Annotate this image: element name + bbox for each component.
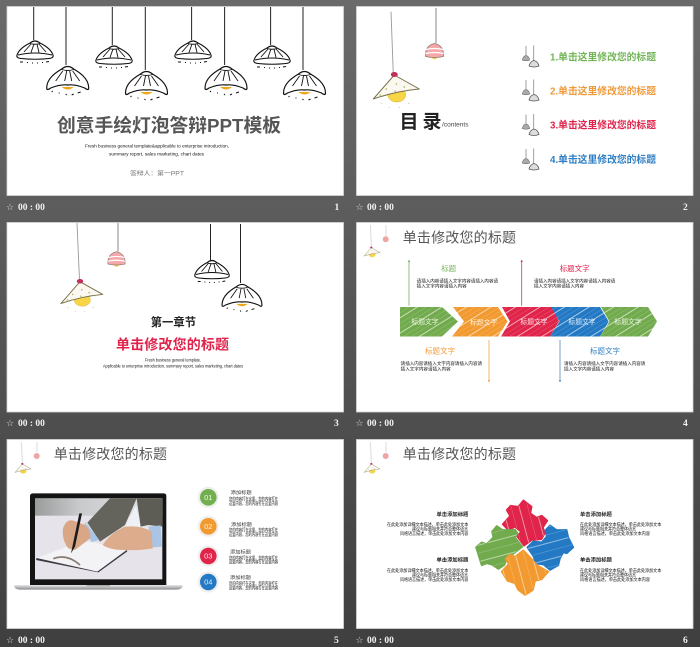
list item 01 xyxy=(198,487,278,508)
heading: contents: 目 录 xyxy=(400,111,442,133)
list item 03: 添加标题 xyxy=(230,548,251,556)
chevron 1: 标题文字 xyxy=(411,317,439,326)
icon: black lamps xyxy=(195,224,262,312)
list item 04: 您的内容打在这里，您的内容打在 xyxy=(229,580,278,587)
chevron 4 xyxy=(550,307,609,336)
arrow: red up xyxy=(520,260,523,306)
list item 03 xyxy=(198,546,278,566)
chapter title: 单击修改您的标题 xyxy=(116,336,229,352)
text block: lower right: 单击添加标题 xyxy=(580,556,612,564)
text block: green: 请插入内容请插入文字内容请插入内容请 xyxy=(417,278,499,284)
chart: four piece puzzle xyxy=(476,500,573,595)
chapter label: 第一章节 xyxy=(151,315,196,329)
text block: upper left: 建议与标题相关并符合整体语言 xyxy=(412,526,469,532)
chapter description: Fresh business general template. xyxy=(145,358,201,362)
heading: contents xyxy=(400,111,468,133)
footer: slide 6: 00 : 00 xyxy=(367,636,394,646)
list item 01: 添加标题 xyxy=(231,489,252,496)
icon: pink lamp xyxy=(108,223,125,267)
footer: slide 5: ☆ xyxy=(6,636,14,646)
chevron 3 xyxy=(501,307,559,336)
text block: blue xyxy=(564,346,646,372)
footer: slide 5 xyxy=(6,636,339,646)
text block: upper left: 在此处添加详细文本描述，单击此处添加文本 xyxy=(387,521,469,528)
list item 2: 2.单击这里修改您的标题 xyxy=(550,84,656,97)
list item 01: 这里内容，您的内容打在这里内容 xyxy=(229,500,278,507)
panel: slide 4 process xyxy=(356,222,693,412)
list item 3 xyxy=(522,114,656,136)
text block: lower right: 在此处添加详细文本描述，单击此处添加文本 xyxy=(580,567,662,574)
footer: slide 3: 00 : 00 xyxy=(18,419,45,429)
list item 02: 您的内容打在这里，您的内容打在 xyxy=(229,526,278,534)
text block: green: 插入文字内容请插入内容 xyxy=(417,282,467,290)
text block: upper right: 在此处添加详细文本描述，单击此处添加文本 xyxy=(580,521,662,528)
list item 03: 03 xyxy=(204,552,212,561)
list item 03: 您的内容打在这里，您的内容打在 xyxy=(229,554,278,561)
text block: lower right xyxy=(580,556,662,583)
text block: orange: 插入文字内容请插入内容 xyxy=(401,365,451,372)
arrow: blue down xyxy=(559,340,561,382)
footer: slide 5: 00 : 00 xyxy=(18,636,45,646)
slide title: 单击修改您的标题 xyxy=(54,446,167,462)
text block: upper right: 建议与标题相关并符合整体语言 xyxy=(580,526,637,532)
text block: orange xyxy=(401,346,483,372)
list item 03: 这里内容，您的内容打在这里内容 xyxy=(229,559,278,566)
panel: slide 6 puzzle xyxy=(356,440,693,628)
text block: blue: 请插入内容请插入文字内容请插入内容请 xyxy=(564,360,646,367)
footer: slide 4: ☆ xyxy=(356,419,364,429)
text block: lower left: 单击添加标题 xyxy=(437,556,469,564)
text block: upper right: 风格语言描述，单击此处添加文本内容 xyxy=(580,530,651,537)
text block: upper left xyxy=(387,510,469,537)
arrow: green up xyxy=(408,260,410,306)
list item 04: 添加标题 xyxy=(230,574,251,581)
footer: slide 6: 6 xyxy=(683,636,688,646)
list item 2 xyxy=(522,80,656,101)
text block: lower right: 建议与标题相关并符合整体语言 xyxy=(580,572,637,578)
text block: red: 插入文字内容请插入内容 xyxy=(534,282,585,290)
slide title: 单击修改您的标题 xyxy=(403,230,516,246)
text block: upper right: 单击添加标题 xyxy=(580,510,612,518)
chevron 3: 标题文字 xyxy=(520,317,548,326)
arrow: orange down xyxy=(488,340,490,382)
icon: mini lamps xyxy=(15,442,40,476)
panel: slide 2 contents xyxy=(356,6,693,196)
list item 4 xyxy=(522,148,656,170)
footer: slide 2: 2 xyxy=(683,203,688,213)
footer: slide 1 xyxy=(6,203,340,213)
footer: slide 2: 00 : 00 xyxy=(367,203,394,213)
icon: mini lamps xyxy=(364,442,389,476)
list item 1: 1.单击这里修改您的标题 xyxy=(550,50,656,63)
list item 1 xyxy=(522,46,656,67)
subtitle text: Fresh business general template&applicable to enterprise introduction, xyxy=(85,144,229,148)
chevron 1 xyxy=(400,307,458,336)
chart: chevron process xyxy=(400,307,657,336)
puzzle piece green xyxy=(476,526,522,569)
puzzle piece red xyxy=(503,500,547,546)
icon: mini lamps xyxy=(364,225,389,259)
panel: slide 3 chapter xyxy=(7,222,344,412)
list item 4: 4.单击这里修改您的标题 xyxy=(550,153,656,166)
laptop with photo xyxy=(14,493,183,590)
list item 01: 您的内容打在这里，您的内容打在 xyxy=(229,496,278,502)
footer: slide 5: 5 xyxy=(334,636,339,646)
text block: orange: 标题文字 xyxy=(425,346,455,356)
text block: upper left: 单击添加标题 xyxy=(437,510,469,518)
subtitle text: summary report, sales marketing, chart dates xyxy=(109,152,205,156)
text block: red xyxy=(534,263,616,290)
text block: lower left: 风格语言描述，单击此处添加文本内容 xyxy=(400,576,469,583)
heading: contents: /contents xyxy=(442,122,468,128)
footer: slide 2: ☆ xyxy=(356,203,364,213)
footer: slide 3: ☆ xyxy=(6,419,14,429)
text block: blue: 标题文字 xyxy=(590,346,620,356)
footer: slide 2 xyxy=(356,203,688,213)
puzzle piece orange xyxy=(502,550,548,595)
list item 02: 添加标题 xyxy=(231,521,252,528)
text block: green xyxy=(417,263,499,290)
list item 02: 这里内容，您的内容打在这里内容 xyxy=(229,531,278,538)
icon: row of hanging black lamps xyxy=(17,7,325,100)
chevron 4: 标题文字 xyxy=(568,317,596,326)
text block: lower right: 风格语言描述，单击此处添加文本内容 xyxy=(580,576,651,583)
text block: green: 标题 xyxy=(441,263,457,273)
footer: slide 1: 00 : 00 xyxy=(18,203,45,213)
icon: coloured cone lamp xyxy=(373,12,419,108)
footer: slide 6 xyxy=(356,636,688,646)
footer: slide 3: 3 xyxy=(334,419,339,429)
list item 3: 3.单击这里修改您的标题 xyxy=(550,118,656,131)
list item 02 xyxy=(198,516,278,538)
footer: slide 4: 4 xyxy=(683,419,688,429)
list item 02: 02 xyxy=(204,522,212,531)
presenter: 答辩人：第一PPT xyxy=(130,170,184,178)
slide title: 单击修改您的标题 xyxy=(403,446,516,462)
panel: slide 5 laptop xyxy=(7,440,344,628)
list item 04 xyxy=(198,572,278,592)
title: 创意手绘灯泡答辩PPT模板 xyxy=(57,115,281,136)
footer: slide 3 xyxy=(6,419,339,429)
text block: lower left: 建议与标题相关并符合整体语言 xyxy=(412,572,469,578)
footer: slide 1: 1 xyxy=(334,203,340,213)
list item 04: 04 xyxy=(204,578,212,587)
panel: slide 1 cover xyxy=(7,6,344,196)
footer: slide 4 xyxy=(356,419,688,429)
subtitle text xyxy=(85,144,229,156)
chevron 5 xyxy=(600,307,657,336)
text block: lower left: 在此处添加详细文本描述，单击此处添加文本 xyxy=(387,567,469,574)
icon: cone lamp xyxy=(61,223,103,312)
footer: slide 1: ☆ xyxy=(6,203,14,213)
footer: slide 6: ☆ xyxy=(356,636,364,646)
chevron 5: 标题文字 xyxy=(614,317,642,326)
icon: pink lamp xyxy=(425,8,444,60)
chapter description: Applicable to enterprise introduction, summary report, sales marketing, chart dates xyxy=(103,364,244,368)
text block: lower left xyxy=(387,556,469,583)
chevron 2 xyxy=(452,307,508,336)
text block: blue: 插入文字内容请插入内容 xyxy=(564,365,615,372)
text block: red: 标题文字 xyxy=(560,263,590,273)
list item 01: 01 xyxy=(204,493,212,502)
list item 04: 这里内容，您的内容打在这里内容 xyxy=(229,585,278,592)
chapter description xyxy=(103,358,244,368)
chevron 2: 标题文字 xyxy=(470,318,497,326)
puzzle piece blue xyxy=(527,525,573,570)
footer: slide 4: 00 : 00 xyxy=(367,419,394,429)
text block: red: 请插入内容请插入文字内容请插入内容请 xyxy=(534,278,616,284)
text block: orange: 请插入内容请插入文字内容请插入内容请 xyxy=(401,360,483,367)
text block: upper left: 风格语言描述，单击此处添加文本内容 xyxy=(400,530,469,537)
text block: upper right xyxy=(580,510,662,537)
